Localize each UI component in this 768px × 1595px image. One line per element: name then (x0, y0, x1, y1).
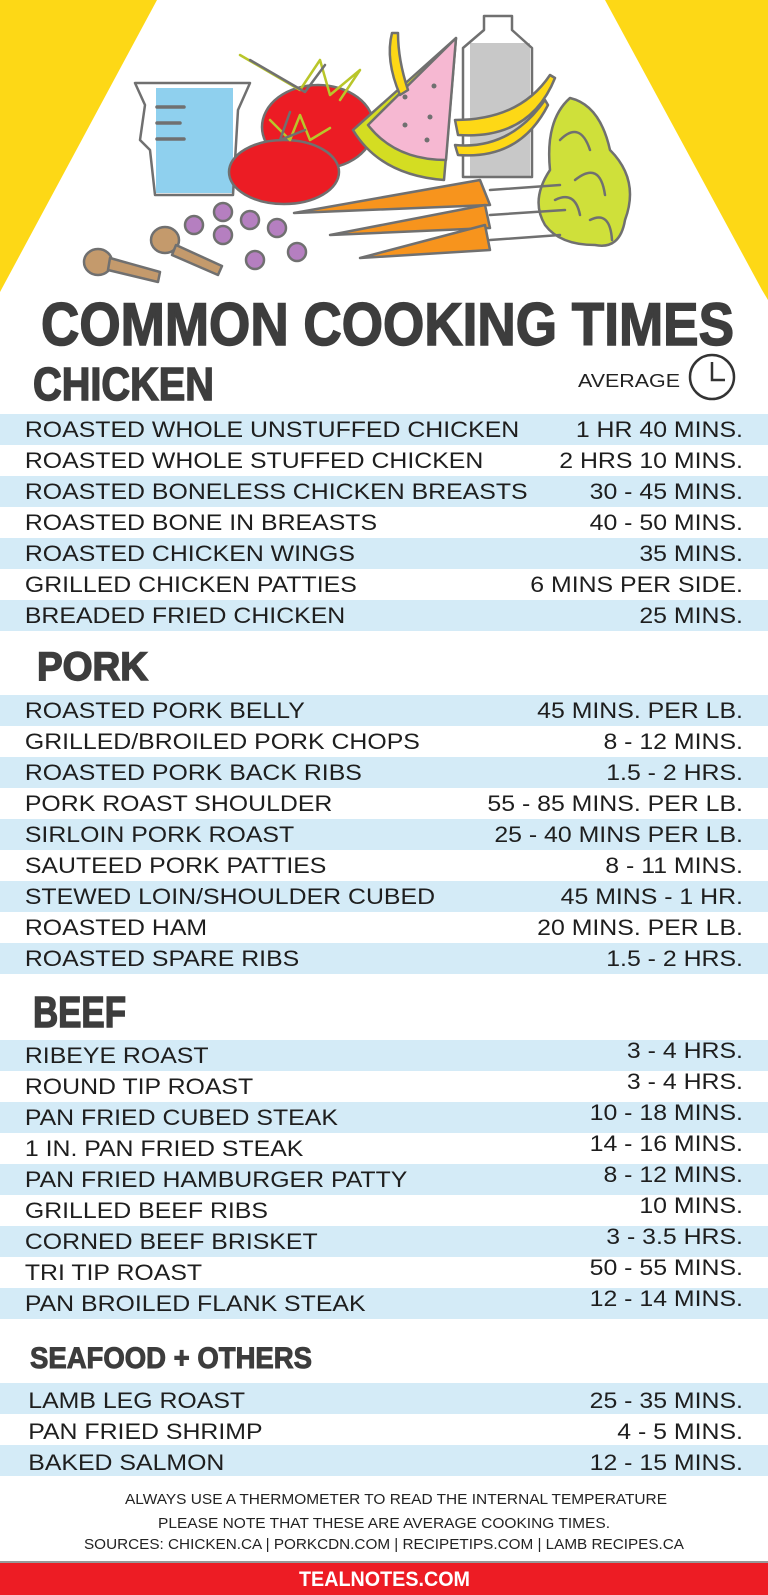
table: pork: 8 - 11 MINS. (605, 853, 743, 878)
table: beef: CORNED BEEF BRISKET (25, 1229, 318, 1254)
background yellow corners (0, 0, 768, 300)
table: pork: 45 MINS - 1 HR. (561, 884, 743, 909)
icon: tomatoes (229, 55, 374, 204)
table: pork: 1.5 - 2 HRS. (606, 760, 743, 785)
table: pork (0, 695, 768, 974)
heading: chicken: CHICKEN (33, 358, 214, 410)
table: pork: ROASTED HAM (25, 915, 207, 940)
table: pork: PORK ROAST SHOULDER (25, 791, 332, 816)
table: chicken: 2 HRS 10 MINS. (559, 448, 743, 473)
table: pork: 8 - 12 MINS. (603, 729, 743, 754)
table: pork: 55 - 85 MINS. PER LB. (487, 791, 743, 816)
legend: average: AVERAGE (578, 371, 680, 391)
table: pork: GRILLED/BROILED PORK CHOPS (25, 729, 420, 754)
table: seafood: 12 - 15 MINS. (590, 1450, 743, 1475)
table: seafood: BAKED SALMON (28, 1450, 224, 1475)
table: beef: PAN FRIED HAMBURGER PATTY (25, 1167, 408, 1192)
icon: measuring cup (135, 83, 250, 195)
table: chicken: ROASTED BONE IN BREASTS (25, 510, 377, 535)
footer notes (84, 1491, 684, 1553)
heading: beef: BEEF (33, 988, 126, 1037)
table: beef: 10 - 18 MINS. (590, 1100, 743, 1125)
table: beef: GRILLED BEEF RIBS (25, 1198, 268, 1223)
icon: bottle (463, 16, 532, 177)
illustration: food (84, 16, 630, 282)
table: seafood: LAMB LEG ROAST (28, 1388, 245, 1413)
table: pork: ROASTED PORK BELLY (25, 698, 305, 723)
table: chicken: ROASTED WHOLE UNSTUFFED CHICKEN (25, 417, 519, 442)
footer notes: ALWAYS USE A THERMOMETER TO READ THE INTERNAL TEMPERATURE (125, 1491, 667, 1508)
table: beef: ROUND TIP ROAST (25, 1074, 253, 1099)
table: beef: 14 - 16 MINS. (590, 1131, 743, 1156)
table: beef: 1 IN. PAN FRIED STEAK (25, 1136, 304, 1161)
table: beef: 50 - 55 MINS. (590, 1255, 743, 1280)
table: beef: 3 - 4 HRS. (627, 1038, 743, 1063)
legend: average (578, 355, 734, 399)
icon: bananas (390, 33, 555, 155)
icon: grapes (185, 203, 306, 269)
table: chicken: ROASTED CHICKEN WINGS (25, 541, 355, 566)
icon: carrots (294, 180, 565, 258)
table: beef: PAN FRIED CUBED STEAK (25, 1105, 338, 1130)
table: seafood: 4 - 5 MINS. (617, 1419, 743, 1444)
table: beef: 3 - 4 HRS. (627, 1069, 743, 1094)
table: chicken: ROASTED WHOLE STUFFED CHICKEN (25, 448, 483, 473)
table: pork: SIRLOIN PORK ROAST (25, 822, 294, 847)
table: pork: SAUTEED PORK PATTIES (25, 853, 326, 878)
table: chicken: GRILLED CHICKEN PATTIES (25, 572, 357, 597)
table: beef: PAN BROILED FLANK STEAK (25, 1291, 366, 1316)
footer bar: TEALNOTES.COM (299, 1568, 470, 1591)
heading: seafood + others: SEAFOOD + OTHERS (30, 1342, 312, 1375)
footer notes: SOURCES: CHICKEN.CA | PORKCDN.COM | RECIPETIPS.COM | LAMB RECIPES.CA (84, 1536, 684, 1553)
table: chicken: ROASTED BONELESS CHICKEN BREASTS (25, 479, 528, 504)
heading: pork: PORK (37, 645, 148, 689)
table: chicken: 40 - 50 MINS. (590, 510, 743, 535)
table: chicken: 35 MINS. (639, 541, 743, 566)
table: chicken: 25 MINS. (639, 603, 743, 628)
table: chicken: BREADED FRIED CHICKEN (25, 603, 345, 628)
table: pork: STEWED LOIN/SHOULDER CUBED (25, 884, 435, 909)
icon: measuring spoons (84, 227, 222, 282)
footer bar (0, 1561, 768, 1595)
icon: greens (539, 98, 630, 246)
table: seafood (0, 1383, 768, 1476)
footer notes: PLEASE NOTE THAT THESE ARE AVERAGE COOKING TIMES. (158, 1515, 610, 1532)
table: chicken: 6 MINS PER SIDE. (530, 572, 743, 597)
table: chicken (0, 414, 768, 631)
table: seafood: 25 - 35 MINS. (590, 1388, 743, 1413)
table: chicken: 30 - 45 MINS. (590, 479, 743, 504)
table: beef (0, 1038, 768, 1319)
table: seafood: PAN FRIED SHRIMP (28, 1419, 263, 1444)
table: pork: 1.5 - 2 HRS. (606, 946, 743, 971)
table: pork: 20 MINS. PER LB. (537, 915, 743, 940)
table: beef: 12 - 14 MINS. (590, 1286, 743, 1311)
table: beef: TRI TIP ROAST (25, 1260, 202, 1285)
icon: watermelon (353, 38, 456, 180)
table: beef: 8 - 12 MINS. (603, 1162, 743, 1187)
table: pork: ROASTED SPARE RIBS (25, 946, 299, 971)
table: pork: ROASTED PORK BACK RIBS (25, 760, 362, 785)
table: pork: 25 - 40 MINS PER LB. (494, 822, 743, 847)
table: pork: 45 MINS. PER LB. (537, 698, 743, 723)
table: beef: 10 MINS. (639, 1193, 743, 1218)
table: chicken: 1 HR 40 MINS. (576, 417, 743, 442)
table: beef: 3 - 3.5 HRS. (606, 1224, 743, 1249)
table: beef: RIBEYE ROAST (25, 1043, 209, 1068)
